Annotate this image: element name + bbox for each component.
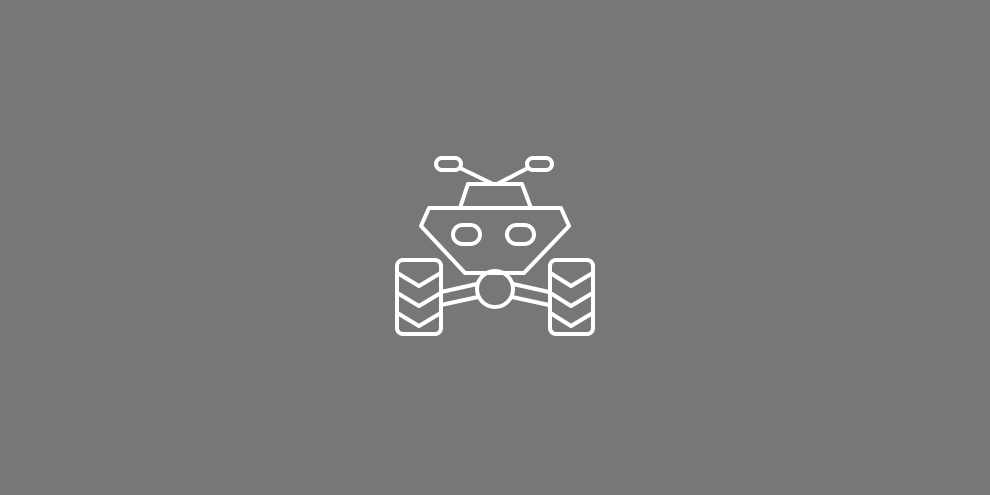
axle hub (477, 271, 513, 307)
left wheel tread (399, 274, 439, 326)
right wheel tread (552, 274, 591, 326)
right mirror (527, 158, 552, 170)
handlebars (460, 168, 528, 184)
right wheel (550, 260, 593, 334)
axles (441, 284, 549, 305)
left mirror (436, 158, 461, 170)
body (421, 208, 569, 273)
left eye (453, 225, 480, 244)
right eye (507, 225, 534, 244)
left wheel (397, 260, 441, 334)
cabin (460, 184, 531, 208)
